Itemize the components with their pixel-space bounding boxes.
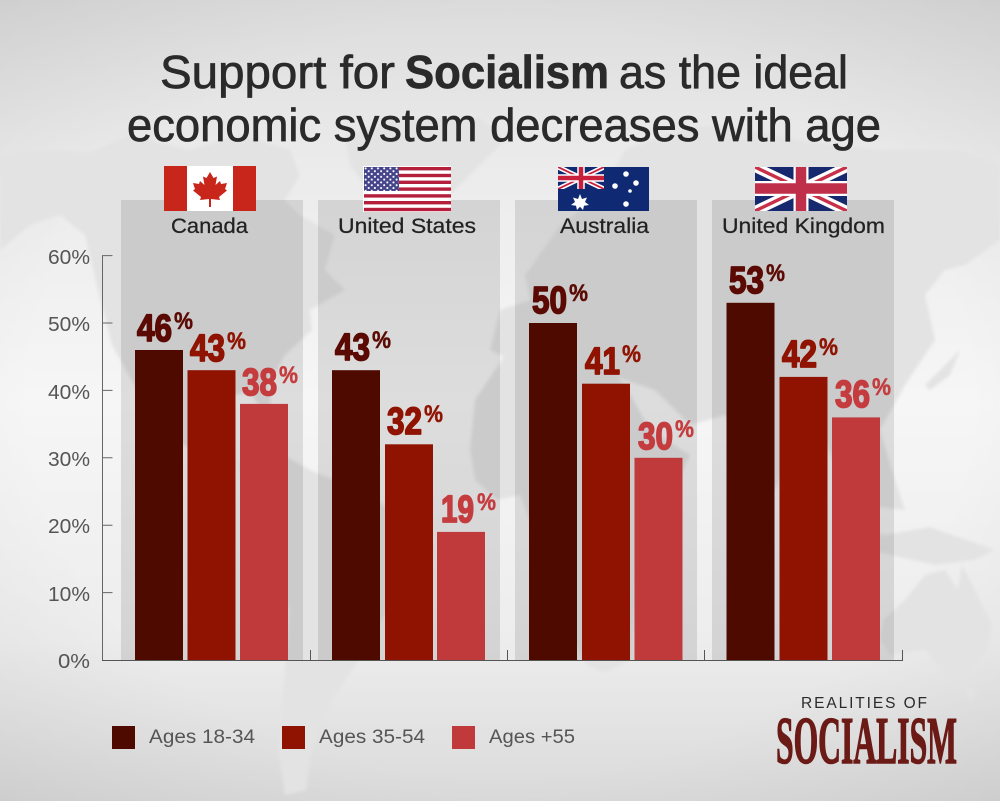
country label: Australia: Australia <box>560 215 649 238</box>
value: United Kingdom 18-34: % <box>766 260 785 287</box>
value: Australia 18-34: % <box>569 280 588 307</box>
icon: United States flag <box>363 166 451 212</box>
y axis with tick labels: 0% <box>58 650 90 673</box>
value: United Kingdom 55+: 36 <box>835 374 870 416</box>
value: Canada 55+: % <box>279 362 298 389</box>
title: as the ideal <box>619 46 848 98</box>
bar: Australia 18-34 <box>529 323 577 660</box>
legend <box>112 726 575 749</box>
y axis with tick labels <box>48 246 112 673</box>
panel: Australia background <box>515 200 697 660</box>
panel: Canada background <box>121 200 303 660</box>
legend item: Ages 18-34: Ages 18-34 <box>149 726 255 748</box>
bar: United Kingdom 35-54 <box>780 377 828 660</box>
bar: United Kingdom 55+ <box>832 417 880 660</box>
country label: Canada: Canada <box>171 215 248 238</box>
value: Canada 55+: 38 <box>242 362 277 404</box>
value: United States 55+: % <box>477 489 496 516</box>
title <box>127 46 881 151</box>
logo: Realities of Socialism: REALITIES OF <box>801 695 927 712</box>
panel: United Kingdom background <box>712 200 894 660</box>
value: United Kingdom 35-54: % <box>819 334 838 361</box>
value: Australia 55+: 30 <box>638 416 673 458</box>
panel: United States background <box>318 200 500 660</box>
value: United States 18-34: % <box>372 327 391 354</box>
y axis with tick labels: 10% <box>48 583 90 606</box>
value: Canada 18-34: 46 <box>137 308 172 350</box>
legend item: Ages 18-34 <box>112 726 255 749</box>
title: economic system decreases with age <box>127 99 881 151</box>
country label: United States: United States <box>338 215 476 238</box>
chart group: United Kingdom <box>726 260 891 660</box>
value: United Kingdom 18-34: 53 <box>729 260 764 302</box>
legend item: Ages 35-54 <box>282 726 425 749</box>
x axis baseline and ticks <box>102 650 902 660</box>
value: United States 55+: 19 <box>441 489 474 531</box>
y axis with tick labels: 50% <box>48 313 90 336</box>
bar: United States 35-54 <box>385 444 433 660</box>
legend item: Ages +55 <box>452 726 575 749</box>
value: Canada 18-34: % <box>174 308 193 335</box>
y axis with tick labels: 30% <box>48 448 90 471</box>
icon: United Kingdom flag <box>755 167 847 211</box>
bar: United States 55+ <box>437 532 485 660</box>
icon: Canada flag <box>164 166 256 211</box>
bar: Canada 18-34 <box>135 350 183 660</box>
value: United States 35-54: 32 <box>387 401 422 443</box>
bar: Australia 55+ <box>634 458 682 660</box>
y axis with tick labels: 40% <box>48 381 90 404</box>
legend item: Ages 35-54: Ages 35-54 <box>319 726 425 748</box>
chart group: Canada <box>135 308 298 660</box>
icon: Australia flag <box>558 167 649 211</box>
bar: Canada 35-54 <box>188 370 236 660</box>
chart group: Australia <box>529 280 694 660</box>
value: United Kingdom 55+: % <box>872 374 891 401</box>
value: Australia 35-54: % <box>622 341 641 368</box>
value: Australia 55+: % <box>675 416 694 443</box>
chart group: United States <box>332 327 496 660</box>
country label: United Kingdom: United Kingdom <box>722 215 885 238</box>
value: Canada 35-54: % <box>227 328 246 355</box>
bar: United States 18-34 <box>332 370 380 660</box>
y axis with tick labels: 60% <box>48 246 90 269</box>
y axis with tick labels: 20% <box>48 515 90 538</box>
bar: Australia 35-54 <box>582 384 630 660</box>
value: Australia 18-34: 50 <box>532 280 567 322</box>
title: Socialism <box>405 46 609 98</box>
bar: United Kingdom 18-34 <box>726 303 774 660</box>
value: United States 18-34: 43 <box>335 327 370 369</box>
bar: Canada 55+ <box>240 404 288 660</box>
value: Australia 35-54: 41 <box>585 341 620 383</box>
title: Support for <box>160 46 395 98</box>
value: United States 35-54: % <box>424 401 443 428</box>
value: Canada 35-54: 43 <box>190 328 225 370</box>
legend item: Ages +55: Ages +55 <box>489 726 575 748</box>
value: United Kingdom 35-54: 42 <box>782 334 817 376</box>
